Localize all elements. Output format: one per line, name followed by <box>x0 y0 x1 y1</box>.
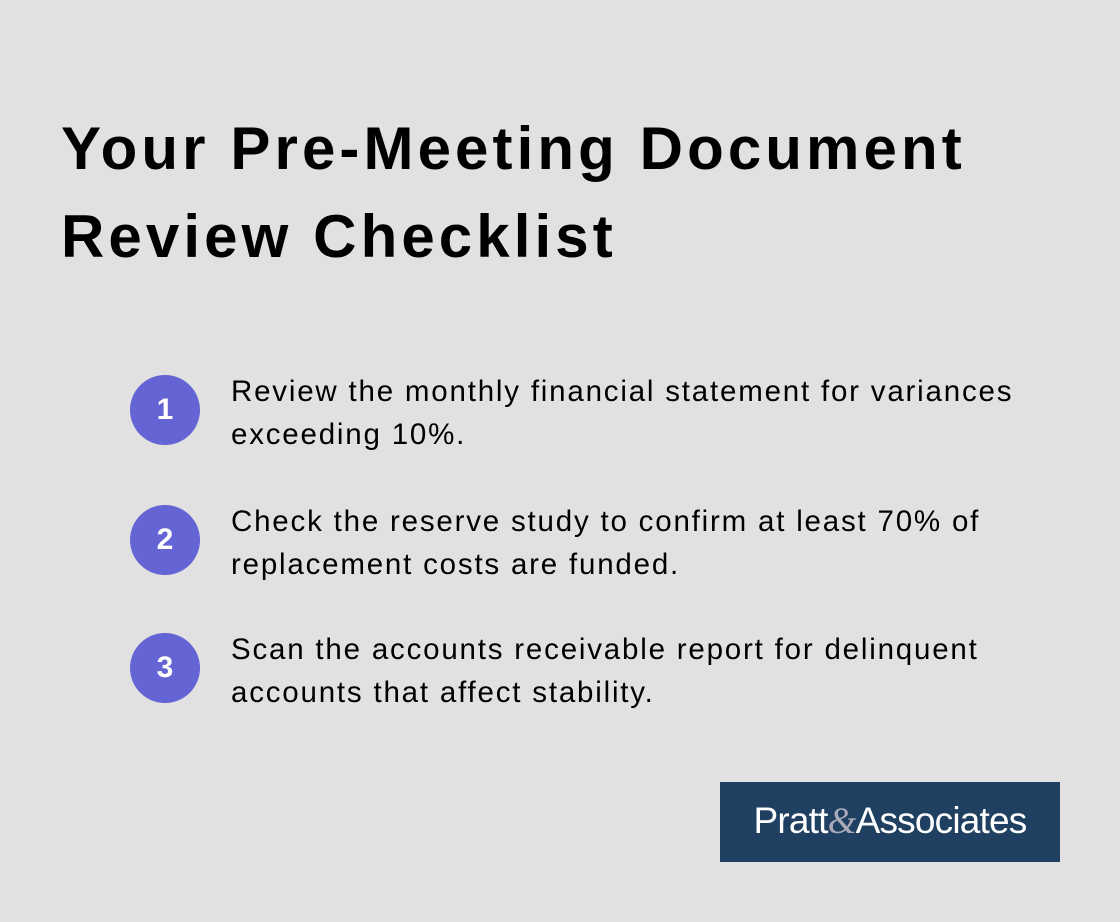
item 2 text <box>231 505 980 581</box>
item 3 <box>130 633 979 709</box>
item 3 text: Scan the accounts receivable report for delinquent <box>231 633 979 666</box>
item 1 text: exceeding 10%. <box>231 418 466 451</box>
item 1 <box>130 375 1013 451</box>
item 1 text: Review the monthly financial statement for variances <box>231 375 1013 408</box>
item 1 text <box>231 375 1013 451</box>
number circle 1: 1 <box>157 393 173 426</box>
item 2 <box>130 505 980 581</box>
item 3 text: accounts that affect stability. <box>231 676 655 709</box>
number circle 2: 2 <box>157 523 173 556</box>
logo <box>720 782 1060 862</box>
item 3 text <box>231 633 979 709</box>
number circle 2 <box>130 505 200 575</box>
number circle 3 <box>130 633 200 703</box>
title: Review Checklist <box>61 203 617 270</box>
title <box>61 115 966 270</box>
number circle 3: 3 <box>157 651 173 684</box>
number circle 1 <box>130 375 200 445</box>
item 2 text: Check the reserve study to confirm at least 70% of <box>231 505 980 538</box>
item 2 text: replacement costs are funded. <box>231 548 680 581</box>
logo: Pratt&Associates <box>753 800 1027 842</box>
title: Your Pre-Meeting Document <box>61 115 966 182</box>
